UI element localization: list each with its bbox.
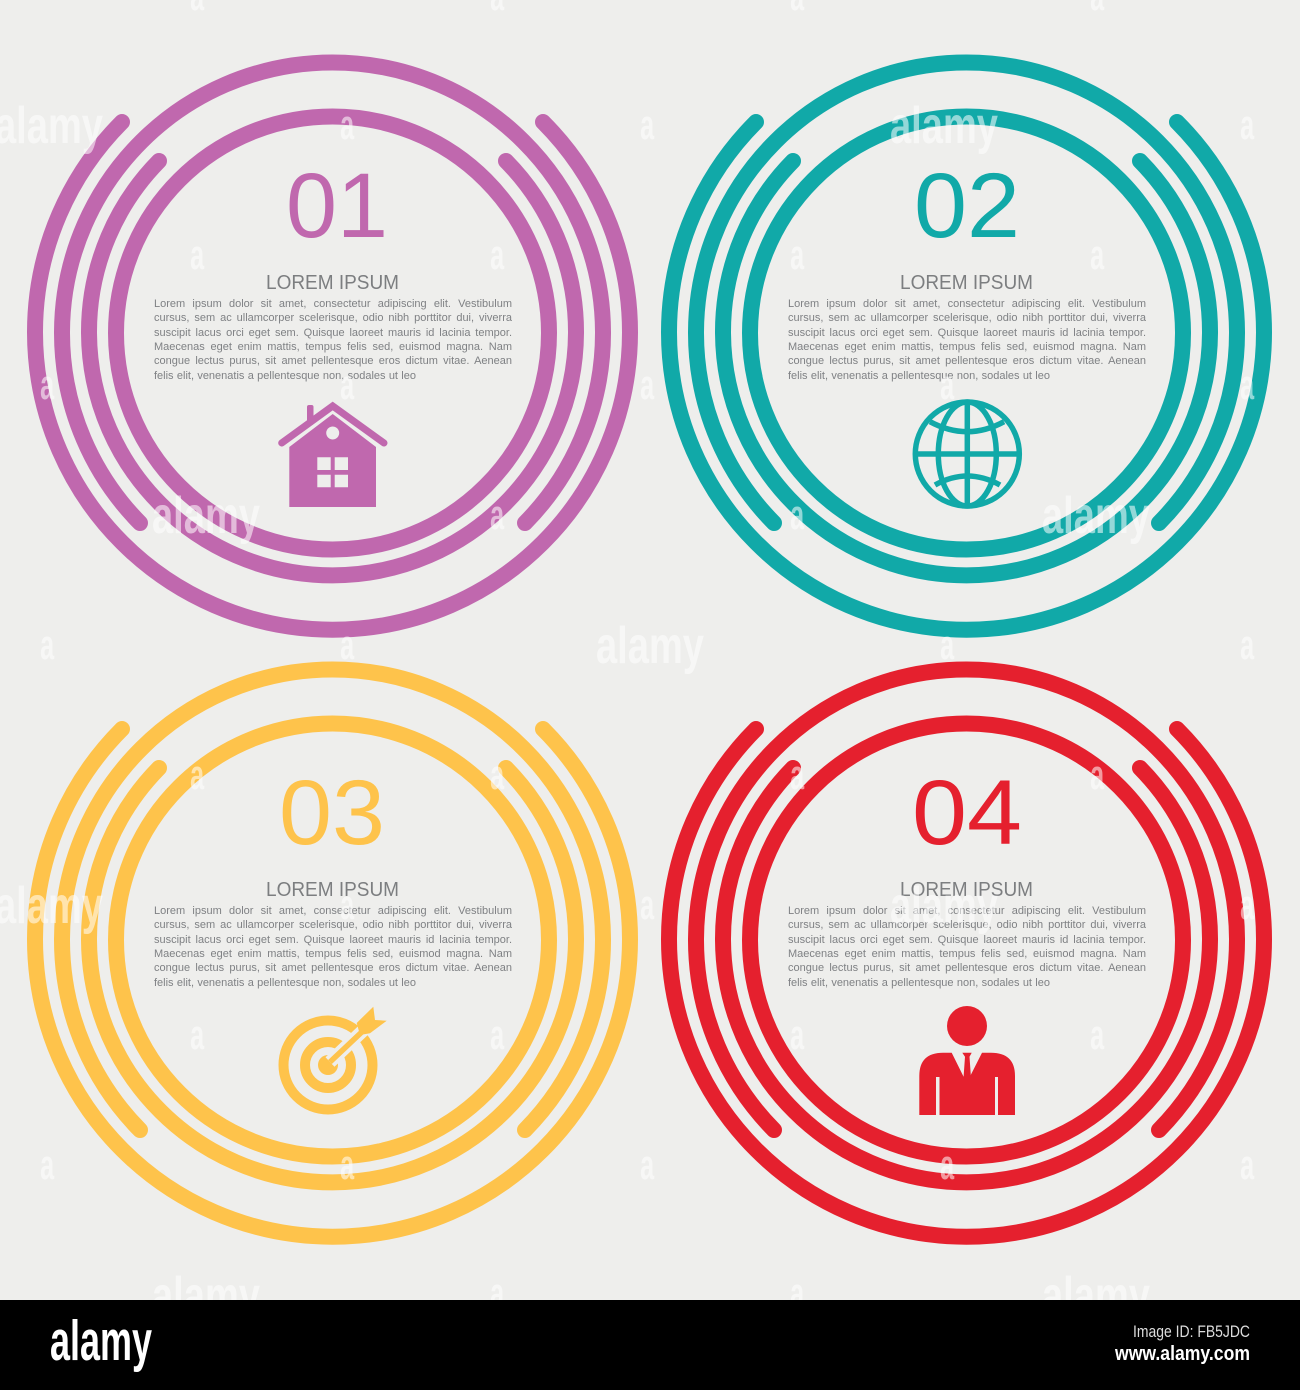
footer bar bbox=[0, 1300, 1300, 1390]
number 03: 03 bbox=[279, 762, 385, 864]
watermark layer: a bbox=[190, 233, 205, 279]
number 01: 01 bbox=[286, 155, 388, 257]
body text: Maecenas eget enim mattis, tempus felis sed, euismod magna. Nam bbox=[154, 341, 512, 353]
watermark layer: a bbox=[790, 493, 805, 539]
watermark layer: a bbox=[490, 753, 505, 799]
watermark layer: a bbox=[1240, 883, 1255, 929]
icon: target with arrow bbox=[284, 1007, 387, 1110]
body text: felis elit, venenatis a pellentesque non, sodales ut leo bbox=[154, 370, 416, 382]
concentric rings bbox=[35, 669, 630, 1237]
heading: LOREM IPSUM bbox=[900, 271, 1033, 294]
icon: person in suit bbox=[919, 1006, 1015, 1115]
watermark layer: alamy bbox=[1042, 487, 1150, 545]
concentric rings bbox=[669, 669, 1264, 1237]
body text: Lorem ipsum dolor sit amet, consectetur adipiscing elit. Vestibulum bbox=[154, 298, 512, 310]
number 02: 02 bbox=[914, 155, 1020, 257]
icon: globe bbox=[915, 402, 1019, 506]
body text bbox=[154, 905, 512, 989]
panel: 04 red bbox=[661, 662, 1272, 1245]
body text: Lorem ipsum dolor sit amet, consectetur adipiscing elit. Vestibulum bbox=[788, 298, 1146, 310]
watermark layer: a bbox=[1090, 753, 1105, 799]
number 04: 04 bbox=[912, 762, 1022, 864]
body text: suscipit lacus orci eget sem. Quisque laoreet mauris id lacinia tempor. bbox=[154, 327, 512, 339]
watermark layer: a bbox=[790, 233, 805, 279]
image id: Image ID: FB5JDC bbox=[1133, 1322, 1250, 1341]
heading: LOREM IPSUM bbox=[900, 878, 1033, 901]
watermark layer: a bbox=[1090, 233, 1105, 279]
body text: felis elit, venenatis a pellentesque non, sodales ut leo bbox=[788, 977, 1050, 989]
body text: Maecenas eget enim mattis, tempus felis sed, euismod magna. Nam bbox=[788, 948, 1146, 960]
body text: Lorem ipsum dolor sit amet, consectetur adipiscing elit. Vestibulum bbox=[788, 905, 1146, 917]
body text bbox=[788, 298, 1146, 382]
body text: cursus, sem ac ullamcorper scelerisque, odio nibh porttitor dui, viverra bbox=[154, 312, 512, 324]
watermark layer: a bbox=[340, 883, 355, 929]
watermark layer: a bbox=[940, 1143, 955, 1189]
watermark layer: a bbox=[340, 1143, 355, 1189]
watermark layer: alamy bbox=[152, 487, 260, 545]
watermark layer: a bbox=[1240, 623, 1255, 669]
watermark layer: a bbox=[1240, 1143, 1255, 1189]
watermark layer: a bbox=[340, 623, 355, 669]
watermark layer: a bbox=[340, 103, 355, 149]
body text: congue lectus purus, sit amet pellentesque eros dictum vitae. Aenean bbox=[788, 355, 1146, 367]
watermark layer: a bbox=[40, 623, 55, 669]
body text: felis elit, venenatis a pellentesque non, sodales ut leo bbox=[788, 370, 1050, 382]
heading: LOREM IPSUM bbox=[266, 878, 399, 901]
body text bbox=[788, 905, 1146, 989]
watermark layer: a bbox=[1090, 1013, 1105, 1059]
body text: cursus, sem ac ullamcorper scelerisque, odio nibh porttitor dui, viverra bbox=[788, 919, 1146, 931]
body text: felis elit, venenatis a pellentesque non, sodales ut leo bbox=[154, 977, 416, 989]
watermark layer: a bbox=[640, 363, 655, 409]
body text: suscipit lacus orci eget sem. Quisque laoreet mauris id lacinia tempor. bbox=[788, 934, 1146, 946]
watermark layer: a bbox=[940, 363, 955, 409]
alamy logo: alamy bbox=[50, 1309, 152, 1373]
watermark layer: a bbox=[1240, 363, 1255, 409]
watermark layer: a bbox=[40, 363, 55, 409]
body text: cursus, sem ac ullamcorper scelerisque, odio nibh porttitor dui, viverra bbox=[154, 919, 512, 931]
watermark layer: a bbox=[640, 103, 655, 149]
watermark layer: a bbox=[640, 1143, 655, 1189]
watermark layer: a bbox=[940, 623, 955, 669]
watermark layer: a bbox=[340, 363, 355, 409]
body text: cursus, sem ac ullamcorper scelerisque, odio nibh porttitor dui, viverra bbox=[788, 312, 1146, 324]
icon: house bbox=[282, 405, 384, 507]
body text: congue lectus purus, sit amet pellentesque eros dictum vitae. Aenean bbox=[154, 962, 512, 974]
watermark layer: alamy bbox=[596, 617, 704, 675]
panel: 02 teal bbox=[661, 54, 1272, 638]
body text: congue lectus purus, sit amet pellentesque eros dictum vitae. Aenean bbox=[788, 962, 1146, 974]
website: www.alamy.com bbox=[1114, 1343, 1250, 1365]
body text bbox=[154, 298, 512, 382]
watermark layer: a bbox=[40, 1143, 55, 1189]
watermark layer: a bbox=[490, 493, 505, 539]
concentric rings bbox=[35, 62, 630, 630]
body text: suscipit lacus orci eget sem. Quisque laoreet mauris id lacinia tempor. bbox=[788, 327, 1146, 339]
heading: LOREM IPSUM bbox=[266, 271, 399, 294]
watermark layer: a bbox=[790, 1013, 805, 1059]
watermark layer: a bbox=[490, 233, 505, 279]
body text: suscipit lacus orci eget sem. Quisque laoreet mauris id lacinia tempor. bbox=[154, 934, 512, 946]
body text: Maecenas eget enim mattis, tempus felis sed, euismod magna. Nam bbox=[788, 341, 1146, 353]
concentric rings bbox=[669, 62, 1264, 630]
panel: 03 yellow bbox=[27, 662, 638, 1245]
watermark layer: a bbox=[190, 1013, 205, 1059]
watermark layer: alamy bbox=[890, 877, 998, 935]
watermark layer: a bbox=[190, 753, 205, 799]
watermark layer: a bbox=[790, 753, 805, 799]
body text: Maecenas eget enim mattis, tempus felis sed, euismod magna. Nam bbox=[154, 948, 512, 960]
watermark layer: alamy bbox=[890, 97, 998, 155]
watermark layer: a bbox=[490, 1013, 505, 1059]
watermark layer: a bbox=[1240, 103, 1255, 149]
body text: Lorem ipsum dolor sit amet, consectetur adipiscing elit. Vestibulum bbox=[154, 905, 512, 917]
panel: 01 purple bbox=[27, 54, 638, 638]
body text: congue lectus purus, sit amet pellentesque eros dictum vitae. Aenean bbox=[154, 355, 512, 367]
watermark layer: a bbox=[640, 883, 655, 929]
